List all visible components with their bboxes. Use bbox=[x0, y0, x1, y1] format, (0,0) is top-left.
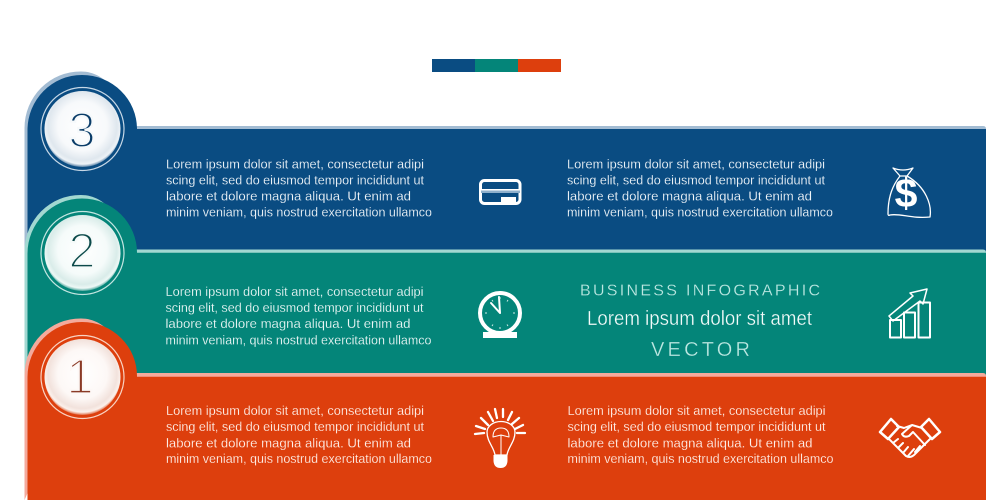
text block: blue left: minim veniam, quis nostrud exercitation ullamco bbox=[166, 206, 432, 220]
text block: orange right: scing elit, sed do eiusmod tempor incididunt ut bbox=[568, 420, 826, 434]
badge: number 3: 3 bbox=[68, 104, 96, 158]
panel: step 1 orange bbox=[24, 318, 986, 500]
text block: blue right: minim veniam, quis nostrud exercitation ullamco bbox=[567, 206, 833, 220]
text block: blue right: Lorem ipsum dolor sit amet, consectetur adipi bbox=[567, 158, 825, 172]
icon: handshake bbox=[880, 419, 940, 457]
text block: blue left: labore et dolore magna aliqua. Ut enim ad bbox=[166, 190, 411, 204]
text block: orange right: minim veniam, quis nostrud exercitation ullamco bbox=[568, 452, 834, 466]
text block: orange left: Lorem ipsum dolor sit amet, consectetur adipi bbox=[166, 404, 424, 418]
text block: teal left bbox=[166, 285, 432, 348]
heading: business infographic bbox=[580, 282, 820, 361]
badge: number 1 bbox=[41, 336, 124, 418]
text block: orange right: Lorem ipsum dolor sit amet, consectetur adipi bbox=[568, 404, 826, 418]
heading: business infographic: Lorem ipsum dolor sit amet bbox=[587, 308, 812, 330]
text block: teal left: minim veniam, quis nostrud exercitation ullamco bbox=[166, 334, 432, 348]
text block: teal left: Lorem ipsum dolor sit amet, consectetur adipi bbox=[166, 285, 424, 299]
text block: orange left: minim veniam, quis nostrud exercitation ullamco bbox=[166, 452, 432, 466]
icon: growth chart bbox=[889, 289, 930, 338]
text block: orange left: labore et dolore magna aliqua. Ut enim ad bbox=[166, 436, 411, 450]
text block: blue right: labore et dolore magna aliqua. Ut enim ad bbox=[567, 190, 812, 204]
badge: number 2: 2 bbox=[68, 224, 96, 278]
text block: blue left bbox=[166, 158, 432, 220]
text block: blue right: scing elit, sed do eiusmod tempor incididunt ut bbox=[567, 174, 825, 188]
colour key bar bbox=[432, 59, 561, 72]
text block: teal left: labore et dolore magna aliqua. Ut enim ad bbox=[166, 317, 410, 331]
icon: light bulb bbox=[475, 409, 525, 468]
heading: business infographic: BUSINESS INFOGRAPHIC bbox=[580, 282, 820, 300]
text block: orange right bbox=[568, 404, 834, 466]
badge: number 3 bbox=[41, 88, 124, 170]
text block: orange left: scing elit, sed do eiusmod tempor incididunt ut bbox=[166, 420, 424, 434]
panel: step 2 teal bbox=[24, 195, 986, 500]
icon: money bag bbox=[888, 168, 930, 217]
badge: number 1: 1 bbox=[66, 350, 94, 404]
heading: business infographic: VECTOR bbox=[651, 339, 750, 361]
text block: blue left: Lorem ipsum dolor sit amet, consectetur adipi bbox=[166, 158, 424, 172]
icon: credit card bbox=[480, 180, 520, 204]
text block: teal left: scing elit, sed do eiusmod tempor incididunt ut bbox=[166, 301, 424, 315]
text block: orange left bbox=[166, 404, 432, 466]
text block: orange right: labore et dolore magna aliqua. Ut enim ad bbox=[568, 436, 812, 450]
text block: blue right bbox=[567, 158, 833, 220]
icon: money bag: $ bbox=[895, 170, 918, 216]
badge: number 2 bbox=[41, 212, 124, 294]
text block: blue left: scing elit, sed do eiusmod tempor incididunt ut bbox=[166, 174, 424, 188]
icon: clock bbox=[480, 293, 520, 338]
